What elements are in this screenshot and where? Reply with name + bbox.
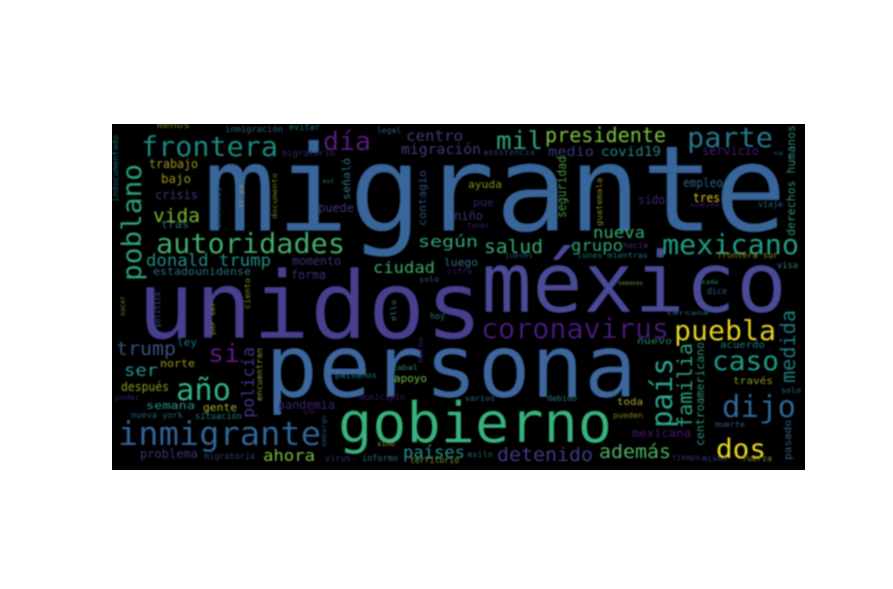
small horizontal words: viaje [758,200,783,209]
medium words: migración [401,142,481,158]
medium words: grupo [571,236,623,255]
small horizontal words: fuerza [742,454,772,463]
small horizontal words: migratoria [204,452,255,462]
small rotated words: embargo [320,415,328,447]
small horizontal words: asistencia [483,148,535,157]
word: mexicano: mexicano [662,228,799,261]
medium words: medio [548,145,594,160]
small rotated words: documento [271,173,279,219]
small horizontal words: nuevos [690,202,721,209]
small horizontal words: dice [707,287,727,297]
small horizontal words: va [773,150,784,157]
small horizontal words: jueves [505,251,533,260]
small horizontal words: acuerdo [720,340,765,351]
small rotated words: entonces [215,187,223,228]
small horizontal words: tener [467,221,490,230]
small horizontal words: nueva york [131,411,183,421]
word: familia (rotated): familia [673,343,697,428]
word: migrante: migrante [203,121,787,260]
small rotated words: por ser [210,302,217,335]
word: presidente: presidente [545,123,666,147]
small horizontal words: territorio [410,456,459,466]
small horizontal words: asilo [467,450,494,459]
small horizontal words: menos [157,121,190,131]
small horizontal words: empleo [683,176,723,190]
word: día: día [323,127,371,157]
small horizontal words: visa [777,261,798,271]
word: coronavirus: coronavirus [481,312,669,345]
medium words: vida [153,205,200,227]
medium words: nueva [593,223,645,242]
small rotated words: ir ya [238,185,245,208]
small rotated words: contagio [416,170,429,226]
medium words: pandemia [278,398,335,412]
small horizontal words: municipio [359,393,405,403]
small horizontal words: bajo [161,172,191,186]
word: dijo: dijo [722,390,796,425]
small horizontal words: forma [291,268,326,282]
small horizontal words: inmigración [225,124,283,135]
medium words [116,127,759,466]
small horizontal words: tiempo [672,453,700,462]
small horizontal words: gente [203,401,237,414]
small rotated words: guatemala [595,178,604,226]
word: inmigrante: inmigrante [118,414,321,453]
medium words: covid19 [601,145,661,160]
small horizontal words: así [322,178,334,185]
small rotated words: política [153,292,162,327]
small rotated words: encuentran [255,348,264,401]
small rotated words: señaló [340,158,353,200]
word: gobierno: gobierno [338,391,612,456]
medium words: detenido [497,444,593,466]
small horizontal words: poder [115,393,140,402]
small horizontal words: norte [160,357,195,370]
small horizontal words: luego [444,256,478,269]
medium words: donald trump [146,251,271,271]
small rotated words: indocumentado [111,135,120,202]
medium words: ahora [263,446,315,465]
small horizontal words: cercana [667,309,708,317]
small horizontal words: través [733,375,773,387]
small horizontal words: niño [454,209,483,223]
small horizontal words: sino [377,440,395,448]
medium words: servicio [702,144,759,158]
small horizontal words: cifra [447,267,472,276]
small horizontal words: solo [419,275,439,284]
small horizontal words: virus [325,454,351,464]
medium words: trump [116,338,176,360]
small rotated words: ello [390,300,398,321]
word: caso: caso [712,346,779,377]
medium words: además [599,441,671,463]
word: mil: mil [496,126,543,155]
medium words: mexicana [632,426,691,440]
small horizontal words: hacia [623,241,648,250]
word: persona: persona [265,316,637,418]
word: poblano (rotated): poblano [117,164,148,281]
small rotated words: hecho [417,337,425,363]
word: derechos humanos (rotated): derechos humanos [784,125,798,236]
medium words: ciudad [373,258,435,277]
word: policía (rotated): policía [239,347,259,418]
small horizontal words: legal [377,126,401,135]
small horizontal words: semana [146,399,195,412]
small horizontal words: apoyo [394,372,427,385]
small horizontal words: migratorio [282,149,335,159]
small horizontal words: lunes mientras [577,251,648,260]
small horizontal words: situación [195,411,242,422]
small horizontal words: cada [702,279,718,286]
small horizontal words: después [121,380,169,394]
small horizontal words: sido [638,193,665,207]
small horizontal words: puede [318,201,354,215]
small horizontal words: trabajo [149,157,198,171]
small horizontal words: toda [617,397,643,408]
medium words: según [418,232,478,251]
medium words: ser [124,361,158,381]
small horizontal words: muerte [715,420,746,429]
small horizontal words: hoy [430,312,446,322]
word: autoridades: autoridades [156,227,345,260]
small horizontal words: debido [547,394,577,403]
medium words: países [403,443,465,463]
black background [112,124,805,470]
word: si: si [208,339,240,368]
small horizontal words: semanas [618,280,643,287]
small horizontal words: frontera sur [717,251,778,261]
word: méxico: méxico [481,234,787,332]
small rotated words [111,135,794,460]
small horizontal words [115,121,801,466]
word: año: año [176,373,231,408]
small horizontal words: gran [304,409,315,416]
words [111,121,801,466]
small rotated words: nacer [119,296,127,316]
small rotated words: seguridad [555,156,569,218]
word: medida (rotated): medida [776,310,800,383]
small horizontal words: cabal [392,364,418,372]
small rotated words: pasado [783,420,794,460]
small horizontal words: informo [362,454,398,464]
word: puebla: puebla [674,314,776,347]
word cloud panel [112,124,805,470]
medium words: centro [406,127,463,145]
small horizontal words: paisanos [335,371,377,380]
word: centroamericano (rotated): centroamericano [693,342,707,446]
word: frontera: frontera [141,130,278,163]
medium words: estadounidense [153,265,251,278]
small horizontal words: evitar [289,123,320,133]
small horizontal words: pueden [613,411,643,420]
small rotated words: ciento [243,278,252,309]
small horizontal words: momento [292,254,341,268]
small horizontal words: tras [161,218,189,231]
small horizontal words: solo [781,386,801,395]
small horizontal words: pue [473,196,494,209]
small horizontal words: crisis [155,188,198,202]
small horizontal words: nuevo [637,337,672,347]
small horizontal words: varios [465,394,495,403]
small horizontal words: ayuda [468,178,502,191]
small horizontal words: mismo [702,454,728,463]
word: dos: dos [716,434,766,465]
medium words: problema [140,447,198,461]
word: parte: parte [687,121,773,154]
small horizontal words: ley [177,336,197,349]
word: país (rotated): país [645,358,679,428]
small horizontal words: tres [693,191,720,205]
medium words: salud [484,236,543,258]
word: unidos: unidos [137,252,483,361]
